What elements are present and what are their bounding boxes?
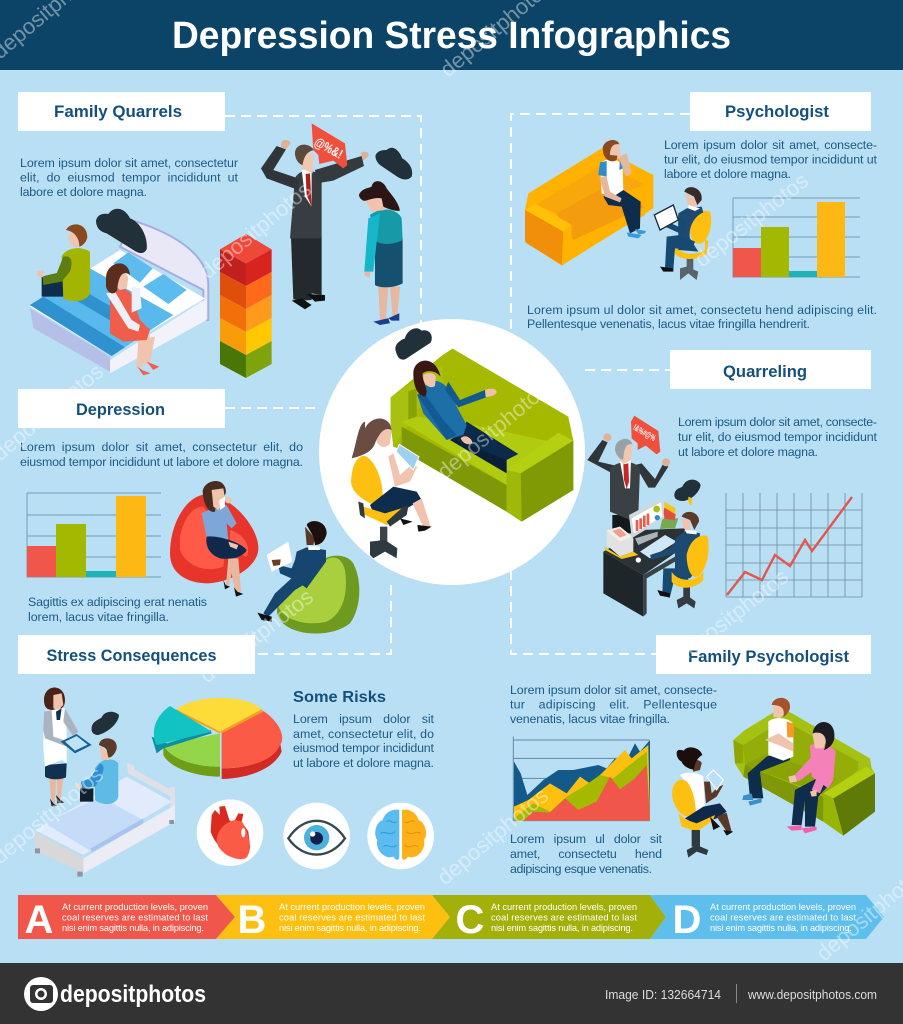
arrow D: nisi enim sagittis nulla, in adipiscing.	[710, 923, 852, 933]
panel: quarreling	[587, 350, 878, 617]
illustration: therapist with couple on sofa	[672, 698, 875, 858]
text block: Sagittis ex adipiscing erat nenatis	[28, 595, 207, 609]
arrow B: nisi enim sagittis nulla, in adipiscing.	[279, 923, 421, 933]
panel: family quarrels	[18, 92, 412, 378]
panel: family psychologist	[510, 635, 875, 876]
text block: tur elit, do eiusmod tempor incididunt	[678, 430, 878, 444]
text block: Lorem ipsum ul dolor sit amet, consectetu hend adipiscing elit.	[527, 303, 877, 317]
icons: heart, eye, brain	[197, 799, 434, 869]
text: depositphotos	[432, 377, 553, 484]
heading: Psychologist	[690, 92, 871, 131]
header banner	[0, 0, 903, 70]
arrow A	[18, 895, 235, 942]
text: depositphotos	[432, 783, 553, 890]
illustration: patient on sofa with therapist	[351, 328, 573, 558]
heading: Depression: Depression	[76, 400, 165, 419]
icon: camera logo	[24, 977, 58, 1011]
arrow D: D	[673, 898, 701, 942]
text: depositphotos	[690, 168, 813, 272]
arrow B	[216, 895, 450, 942]
heading: Family Psychologist	[656, 635, 871, 674]
sub-heading: Some Risks: Some Risks	[293, 689, 386, 706]
text block: venenatis, lacus vitae fringilla.	[510, 712, 670, 726]
icon: eye	[283, 803, 350, 869]
text block: labore et dolore magna.	[20, 185, 147, 199]
icon: brain	[367, 803, 434, 869]
text block: amet, consectetu hend	[510, 847, 662, 861]
illustration: patient on orange sofa and psychologist on chair	[525, 140, 711, 280]
arrow D: coal reserves are estimated to last	[710, 912, 856, 922]
heading: Family Psychologist: Family Psychologist	[688, 647, 849, 666]
text: depositphotos	[195, 177, 316, 284]
area chart	[513, 737, 650, 821]
text block: Lorem ipsum dolor sit amet, consectetur	[20, 156, 238, 170]
website: www.depositphotos.com	[747, 988, 877, 1002]
heading: Psychologist: Psychologist	[725, 102, 829, 121]
arrow A: At current production levels, proven	[62, 902, 208, 912]
text block: elit, do eiusmod tempor incididunt ut	[20, 170, 239, 184]
arrow D: At current production levels, proven	[710, 902, 856, 912]
logo wordmark: depositphotos	[60, 981, 206, 1008]
arrow C	[432, 895, 666, 942]
arrow A: coal reserves are estimated to last	[62, 912, 208, 922]
heading: Quarreling: Quarreling	[723, 362, 807, 381]
heading: Family Quarrels: Family Quarrels	[54, 102, 182, 121]
line chart	[726, 493, 862, 597]
text block: Lorem ipsum dolor sit amet, consecte-	[678, 415, 877, 429]
illustration: couple on bed, quarrel, level stack	[30, 123, 412, 378]
arrow C: nisi enim sagittis nulla, in adipiscing.	[491, 923, 633, 933]
text block: ut labore et dolore magna.	[678, 445, 818, 459]
ribbon: A B C D arrows	[18, 895, 884, 942]
illustration: angry boss and desk worker: !&%#@%	[631, 422, 658, 443]
panel: depression	[18, 389, 359, 634]
arrow D	[650, 895, 884, 942]
text block: tur elit, do eiusmod tempor incididunt ut	[664, 152, 878, 166]
text block: Lorem ipsum ul dolor sit	[510, 832, 663, 846]
footer bar	[0, 963, 903, 1024]
heading: Stress Consequences: Stress Consequences	[46, 646, 216, 665]
panel: stress consequences	[18, 635, 435, 877]
text block: Lorem ipsum dolor sit amet, consecte-	[664, 138, 877, 152]
arrow C: coal reserves are estimated to last	[491, 912, 637, 922]
arrow B: coal reserves are estimated to last	[279, 912, 425, 922]
arrow A: nisi enim sagittis nulla, in adipiscing.	[62, 923, 204, 933]
text block: Lorem ipsum dolor sit amet, consecte-	[510, 683, 717, 697]
icon: heart	[197, 799, 263, 866]
arrow C: C	[456, 898, 484, 942]
text block: labore et dolore magna.	[664, 167, 791, 181]
illustration: woman and man on beanbags	[170, 481, 359, 634]
illustration: doctor, patient, bed and pie chart	[35, 687, 282, 877]
text: depositphotos	[670, 564, 793, 668]
title: Depression Stress Infographics	[172, 15, 731, 57]
text block: Pellentesque venenatis, lacus vitae fringilla hendrerit.	[527, 317, 810, 331]
heading: Family Quarrels	[18, 92, 225, 131]
text block: eiusmod tempor incididunt	[293, 741, 435, 755]
arrow C: At current production levels, proven	[491, 902, 637, 912]
bar chart	[733, 198, 860, 277]
central circle panel	[319, 319, 585, 585]
text block: Lorem ipsum dolor sit amet, consectetur elit, do	[20, 440, 303, 454]
bar chart	[27, 493, 161, 577]
text block: Lorem ipsum dolor sit	[293, 712, 435, 726]
text block: lorem, lacus vitae fringilla.	[28, 610, 169, 624]
arrow A: A	[25, 898, 53, 942]
illustration: couple on bed, quarrel, level stack: @%&!	[312, 134, 345, 162]
text block: ut labore et dolore magna.	[293, 756, 434, 770]
arrow B: At current production levels, proven	[279, 902, 425, 912]
heading: Stress Consequences	[18, 635, 255, 674]
panel: psychologist	[525, 92, 878, 331]
illustration: angry boss and desk worker	[587, 416, 709, 617]
text: depositphotos	[195, 584, 318, 688]
text block: tur adipiscing elit. Pellentesque	[510, 698, 717, 712]
text block: adipiscing esque venenatis.	[510, 862, 652, 876]
arrow B: B	[238, 898, 266, 942]
text block: amet, consectetur elit, do	[293, 727, 434, 741]
text block: eiusmod tempor incididunt ut labore et dolore magna.	[20, 455, 303, 469]
heading: Depression	[18, 389, 225, 428]
heading: Quarreling	[670, 350, 871, 389]
image id: Image ID: 132664714	[605, 988, 721, 1002]
